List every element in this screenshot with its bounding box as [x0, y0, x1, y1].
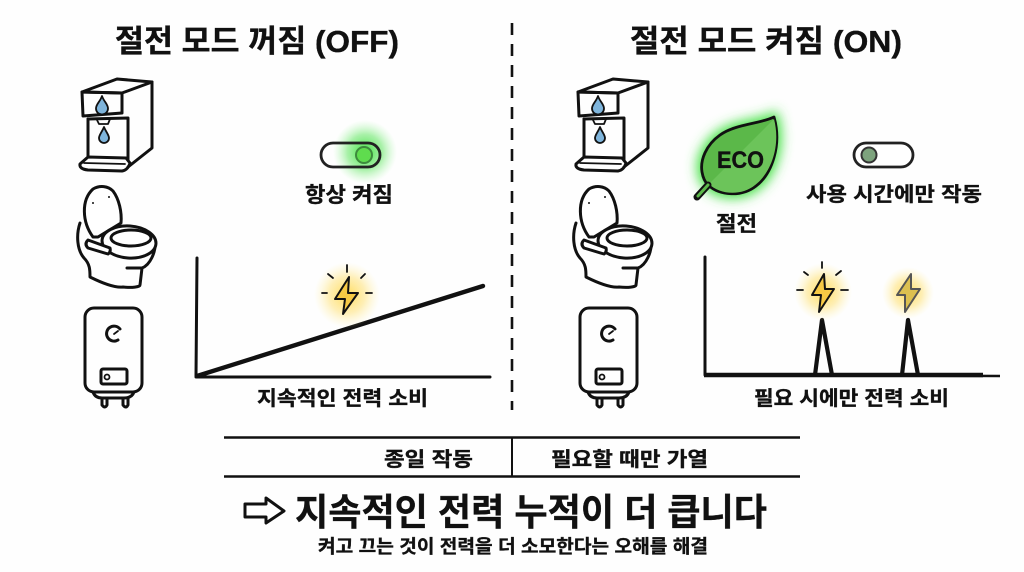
icon: toggle on [321, 120, 397, 184]
panel: power saving mode off [78, 24, 490, 410]
conclusion heading: 지속적인 전력 누적이 더 큽니다 [295, 492, 767, 533]
table: comparison row [224, 437, 800, 476]
icon: outline arrow [245, 498, 284, 523]
panel: power saving mode on [574, 24, 1000, 410]
icon: lightning bolt bright [794, 262, 852, 321]
icon: bidet toilet [78, 187, 157, 287]
icon: eco leaf: ECO [717, 147, 764, 174]
icon: bidet toilet [574, 187, 653, 287]
label: works only during use: 사용 시간에만 작동 [806, 183, 982, 206]
label: always on: 항상 켜짐 [305, 184, 393, 207]
label: continuous power consumption: 지속적인 전력 소비 [257, 387, 428, 410]
icon: toggle off [854, 143, 913, 167]
cell: heat only when needed: 필요할 때만 가열 [551, 448, 708, 471]
icon: eco leaf [697, 117, 777, 197]
label: power only when needed: 필요 시에만 전력 소비 [754, 387, 949, 410]
chart: power use only when needed [704, 257, 1000, 376]
icon: water purifier [80, 79, 152, 171]
icon: lightning bolt faded [882, 267, 934, 319]
heading: off: 절전 모드 꺼짐 (OFF) [115, 24, 399, 59]
icon: water purifier [576, 79, 648, 171]
chart: continuous power use [196, 258, 490, 377]
label: saving: 절전 [716, 213, 757, 236]
divider: dashed centre line [511, 23, 513, 410]
icon: water heater [580, 308, 637, 407]
heading: on: 절전 모드 켜짐 (ON) [630, 24, 902, 59]
icon: lightning bolt [314, 262, 380, 328]
subtitle: 켜고 끄는 것이 전력을 더 소모한다는 오해를 해결 [318, 536, 708, 557]
cell: all day operation: 종일 작동 [384, 448, 473, 471]
icon: water heater [85, 308, 142, 407]
